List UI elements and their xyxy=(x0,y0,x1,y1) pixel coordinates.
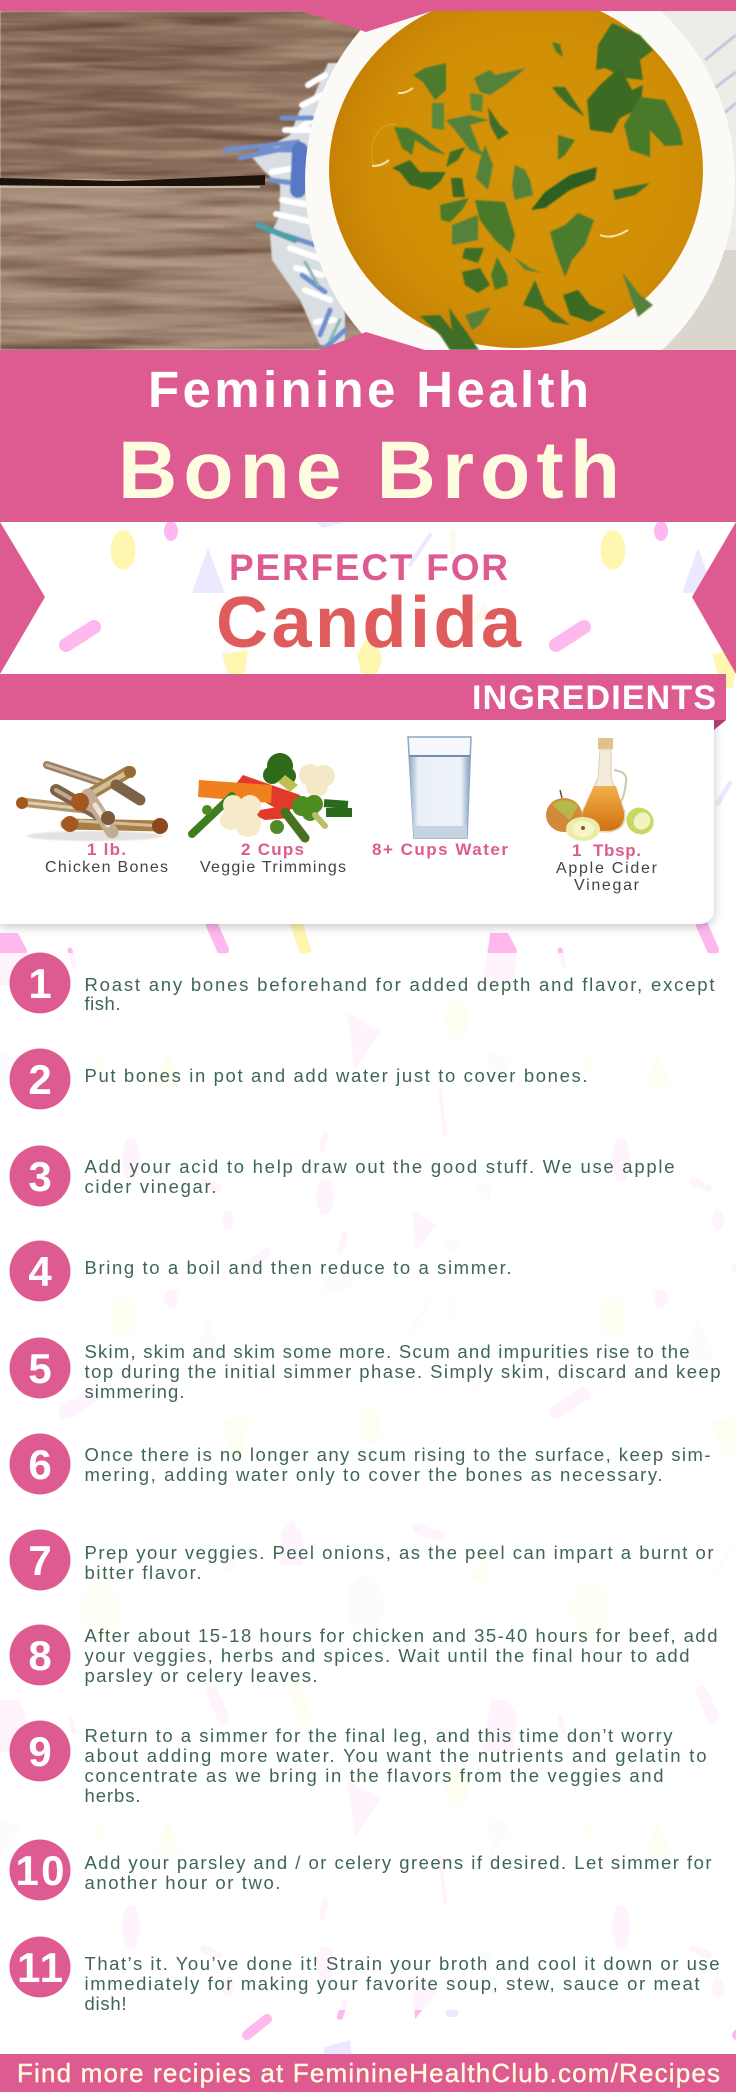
card xyxy=(0,720,714,924)
cloth under bowl xyxy=(225,63,345,348)
step 5: simmering. xyxy=(84,1381,184,1402)
step 8: your veggies, herbs and spices. Wait until the final hour to add xyxy=(84,1645,690,1666)
icon: vegetables xyxy=(192,753,352,838)
icon: chicken bones xyxy=(16,765,168,841)
broth xyxy=(329,0,703,348)
step 6: mering, adding water only to cover the bones as necessary. xyxy=(84,1464,662,1485)
step 1: Roast any bones beforehand for added depth and flavor, except xyxy=(84,974,715,995)
panel: ingredients xyxy=(0,674,726,924)
step 4: Bring to a boil and then reduce to a simmer. xyxy=(84,1257,511,1278)
ingredient: apple cider vinegar: Apple Cider xyxy=(556,860,658,877)
step 1: fish. xyxy=(84,993,120,1014)
step 3 xyxy=(10,1146,675,1206)
step 1: 1 xyxy=(28,960,52,1007)
ingredient: chicken bones: Chicken Bones xyxy=(45,859,168,876)
wood table xyxy=(0,11,400,350)
step 2: 2 xyxy=(28,1056,52,1103)
subheading: Candida: Candida xyxy=(216,583,522,663)
step 8: 8 xyxy=(28,1632,52,1679)
step 7: bitter flavor. xyxy=(84,1562,202,1583)
step 3: cider vinegar. xyxy=(84,1176,216,1197)
step 3: 3 xyxy=(28,1153,52,1200)
banner xyxy=(0,674,726,720)
heading: Ingredients: INGREDIENTS xyxy=(472,679,716,717)
step 10: Add your parsley and / or celery greens if desired. Let simmer for xyxy=(84,1852,712,1873)
top pink bar with notch xyxy=(0,0,736,32)
icon: glass of water xyxy=(408,737,471,838)
footer bar: Find more recipies at FeminineHealthClub.com/Recipes xyxy=(17,2058,720,2088)
subheading: Perfect for: PERFECT FOR xyxy=(229,547,508,588)
heading: Bone Broth: Bone Broth xyxy=(118,425,620,516)
step 7: Prep your veggies. Peel onions, as the peel can impart a burnt or xyxy=(84,1542,714,1563)
towel at right xyxy=(640,11,736,350)
heading: Feminine Health: Feminine Health xyxy=(148,361,589,418)
step 4 xyxy=(10,1240,511,1302)
step 8 xyxy=(10,1624,718,1686)
step 4: 4 xyxy=(28,1248,52,1295)
step 6 xyxy=(10,1434,710,1494)
ingredient: apple cider vinegar: 1 Tbsp. xyxy=(572,841,641,860)
step 1 xyxy=(10,952,715,1014)
step 2: Put bones in pot and add water just to cover bones. xyxy=(84,1065,588,1086)
step 9 xyxy=(10,1720,706,1806)
hero photo: bowl of broth on wood xyxy=(0,0,736,406)
step 9: concentrate as we bring in the flavors from the veggies and xyxy=(84,1765,664,1786)
step 10: 10 xyxy=(16,1847,64,1894)
step 11 xyxy=(10,1936,720,2014)
step 10: another hour or two. xyxy=(84,1872,280,1893)
step 5: 5 xyxy=(28,1345,52,1392)
parsley leaves xyxy=(392,23,683,350)
step 2 xyxy=(10,1048,588,1110)
step 7: 7 xyxy=(28,1537,52,1584)
step 5: Skim, skim and skim some more. Scum and impurities rise to the xyxy=(84,1341,690,1362)
step 9: about adding more water. You want the nutrients and gelatin to xyxy=(84,1745,706,1766)
step 5 xyxy=(10,1338,720,1402)
ingredient: veggie trimmings xyxy=(200,840,346,876)
step 5: top during the initial simmer phase. Simply skim, discard and keep xyxy=(84,1361,720,1382)
step 9: herbs. xyxy=(84,1785,140,1806)
bowl rim xyxy=(305,0,735,406)
step 8: After about 15-18 hours for chicken and 35-40 hours for beef, add xyxy=(84,1625,718,1646)
step 11: 11 xyxy=(17,1944,63,1991)
step 9: Return to a simmer for the final leg, and this time don’t worry xyxy=(84,1725,673,1746)
step 6: Once there is no longer any scum rising to the surface, keep sim- xyxy=(84,1444,710,1465)
icon: apple cider vinegar xyxy=(546,738,659,841)
ingredient: chicken bones xyxy=(45,840,168,876)
ingredient: veggie trimmings: Veggie Trimmings xyxy=(200,859,346,876)
ingredient: water: 8+ Cups Water xyxy=(372,840,508,859)
ingredient: veggie trimmings: 2 Cups xyxy=(241,840,304,859)
step 11: immediately for making your favorite soup, stew, sauce or meat xyxy=(84,1973,700,1994)
step 11: That’s it. You’ve done it! Strain your broth and cool it down or use xyxy=(84,1953,720,1974)
step 10 xyxy=(10,1840,712,1900)
title band xyxy=(0,332,736,522)
ribbon xyxy=(0,522,736,674)
step 6: 6 xyxy=(28,1441,52,1488)
step 8: parsley or celery leaves. xyxy=(84,1665,318,1686)
ingredient: apple cider vinegar: Vinegar xyxy=(574,877,640,894)
step 7 xyxy=(10,1530,714,1590)
oil ring highlights xyxy=(372,124,396,167)
ingredient: chicken bones: 1 lb. xyxy=(87,840,126,859)
step 9: 9 xyxy=(28,1728,52,1775)
ingredient: apple cider vinegar xyxy=(556,841,658,894)
step 11: dish! xyxy=(84,1993,126,2014)
step 3: Add your acid to help draw out the good stuff. We use apple xyxy=(84,1156,675,1177)
